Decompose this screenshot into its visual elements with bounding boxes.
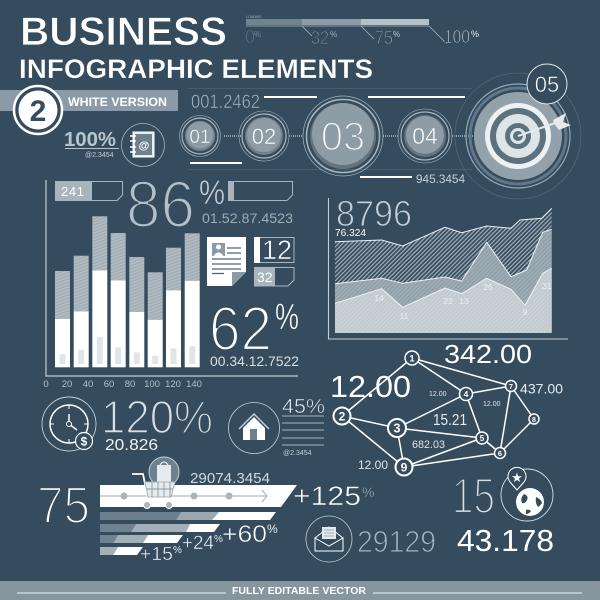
title: infographic elements: INFOGRAPHIC ELEMENTS bbox=[19, 54, 373, 84]
label +24%: % bbox=[214, 534, 223, 545]
bar chart: 100 bbox=[144, 379, 160, 390]
bar chart: 20 bbox=[62, 379, 72, 390]
loading progress bar: 0 bbox=[245, 27, 255, 47]
timeline lines and labels bbox=[188, 88, 478, 186]
label +24%: +24 bbox=[182, 533, 214, 554]
area chart: 22 bbox=[443, 296, 453, 306]
stat 62%: % bbox=[275, 296, 299, 337]
timeline lines and labels: 001.2462 bbox=[191, 92, 260, 113]
icon: resume document bbox=[207, 237, 246, 286]
network diagram: 5 bbox=[480, 434, 485, 443]
stat 62%: 62 bbox=[209, 295, 272, 364]
loading progress bar: % bbox=[471, 29, 479, 39]
network diagram: 1 bbox=[409, 354, 415, 364]
icon: shopping cart bbox=[132, 457, 179, 508]
label +125%: % bbox=[362, 484, 374, 500]
icon: globe with pin: ★ bbox=[511, 470, 523, 485]
stat 86%: 86 bbox=[126, 167, 195, 241]
network diagram: 8 bbox=[532, 417, 536, 424]
area chart: 14 bbox=[374, 293, 384, 303]
stat 15: 15 bbox=[452, 468, 495, 524]
step 02: 02 bbox=[252, 124, 276, 149]
stacked progress bars bbox=[100, 485, 297, 555]
stat 86%: 01.52.87.4523 bbox=[202, 210, 293, 226]
label +15%: +15 bbox=[140, 544, 173, 564]
bar chart: 80 bbox=[125, 379, 135, 390]
bar chart: 0 bbox=[43, 379, 49, 390]
network diagram: 437.00 bbox=[520, 380, 563, 396]
loading progress bar: LOADING bbox=[246, 15, 262, 19]
stat 86%: % bbox=[199, 174, 225, 212]
icon: target with arrow bbox=[455, 73, 581, 199]
tag empty bbox=[228, 181, 292, 201]
icon: globe with pin bbox=[501, 467, 553, 521]
label +60%: % bbox=[267, 522, 278, 536]
icon: clock with dollar bbox=[42, 397, 96, 451]
contact stat 100% bbox=[64, 129, 119, 159]
stat 75: 75 bbox=[37, 477, 90, 535]
title: business: BUSINESS bbox=[20, 10, 227, 54]
version banner: 2 bbox=[30, 95, 46, 128]
area chart: 13 bbox=[459, 296, 469, 306]
footer band bbox=[0, 581, 600, 600]
network diagram bbox=[330, 339, 563, 476]
step 03: 03 bbox=[321, 115, 365, 159]
footer band: FULLY EDITABLE VECTOR bbox=[232, 586, 367, 597]
label +125%: +125 bbox=[293, 481, 361, 511]
area chart: 26 bbox=[483, 282, 493, 292]
stat 45%: @2.3454 bbox=[283, 450, 312, 457]
box 32 bbox=[254, 267, 294, 286]
network diagram: 12.00 bbox=[330, 369, 411, 404]
loading progress bar bbox=[245, 15, 479, 48]
bar chart: 40 bbox=[83, 379, 93, 390]
contact stat 100%: @2.3454 bbox=[85, 152, 114, 159]
area chart: 11 bbox=[400, 311, 409, 321]
loading progress bar: 100 bbox=[444, 27, 470, 47]
stat 45% bbox=[282, 396, 325, 457]
area chart: 31 bbox=[542, 281, 552, 291]
network diagram: 7 bbox=[509, 382, 513, 391]
icon: address book: @ bbox=[139, 140, 150, 152]
step 04: 04 bbox=[412, 123, 438, 149]
bar chart: 140 bbox=[186, 379, 202, 390]
icon: clock with dollar: $ bbox=[81, 434, 88, 448]
step 01 bbox=[180, 116, 220, 156]
label +60%: +60 bbox=[222, 521, 267, 548]
version banner bbox=[0, 86, 178, 134]
icon: open envelope bbox=[306, 516, 352, 562]
network diagram: 2 bbox=[339, 410, 346, 424]
tag 241 bbox=[55, 181, 122, 201]
network diagram: 682.03 bbox=[412, 439, 445, 451]
value 29074.3454: 29074.3454 bbox=[190, 470, 270, 487]
area chart bbox=[328, 193, 568, 339]
stat 120%: 20.826 bbox=[105, 437, 158, 454]
bar chart bbox=[43, 180, 298, 390]
area chart: 8796 bbox=[336, 193, 412, 234]
box 12: 12 bbox=[262, 235, 292, 265]
network diagram: 342.00 bbox=[444, 339, 532, 369]
version banner: WHITE VERSION bbox=[68, 97, 167, 109]
network diagram: 9 bbox=[401, 460, 408, 474]
value 43.178: 43.178 bbox=[457, 523, 554, 558]
tag 241: 241 bbox=[61, 184, 84, 199]
badge 05: 05 bbox=[535, 72, 559, 97]
timeline lines and labels: 945.3454 bbox=[416, 172, 465, 186]
loading progress bar: % bbox=[254, 30, 261, 39]
step 02 bbox=[239, 111, 289, 161]
network diagram: 15.21 bbox=[433, 412, 467, 429]
icon: house bbox=[228, 402, 280, 454]
icon: address book bbox=[122, 124, 164, 166]
network diagram: 12.00 bbox=[358, 458, 388, 472]
stat 62%: 00.34.12.7522 bbox=[210, 353, 299, 369]
stat 120%: 120% bbox=[101, 391, 213, 443]
step 03 bbox=[303, 96, 383, 176]
network diagram: 12.00 bbox=[483, 401, 501, 408]
label +15%: % bbox=[173, 545, 182, 556]
network diagram: 12.00 bbox=[429, 391, 447, 398]
network diagram: 4 bbox=[464, 389, 469, 399]
network diagram: 6 bbox=[498, 449, 502, 458]
bar chart: 120 bbox=[165, 379, 181, 390]
step 04 bbox=[398, 109, 452, 163]
bar chart: 60 bbox=[104, 379, 114, 390]
loading progress bar: % bbox=[393, 30, 400, 39]
stat 86% bbox=[126, 167, 293, 241]
area chart: 76.324 bbox=[335, 227, 366, 239]
loading progress bar: 75 bbox=[375, 28, 393, 48]
value 29129: 29129 bbox=[357, 524, 436, 559]
badge 05 bbox=[527, 64, 567, 104]
loading progress bar: 32 bbox=[311, 28, 329, 48]
loading progress bar: % bbox=[330, 30, 337, 39]
contact stat 100%: 100% bbox=[64, 129, 116, 151]
box 32: 32 bbox=[257, 269, 273, 285]
stat 45%: 45% bbox=[282, 396, 325, 418]
area chart: 9 bbox=[523, 307, 528, 317]
step 01: 01 bbox=[189, 127, 211, 148]
network diagram: 3 bbox=[394, 422, 401, 436]
